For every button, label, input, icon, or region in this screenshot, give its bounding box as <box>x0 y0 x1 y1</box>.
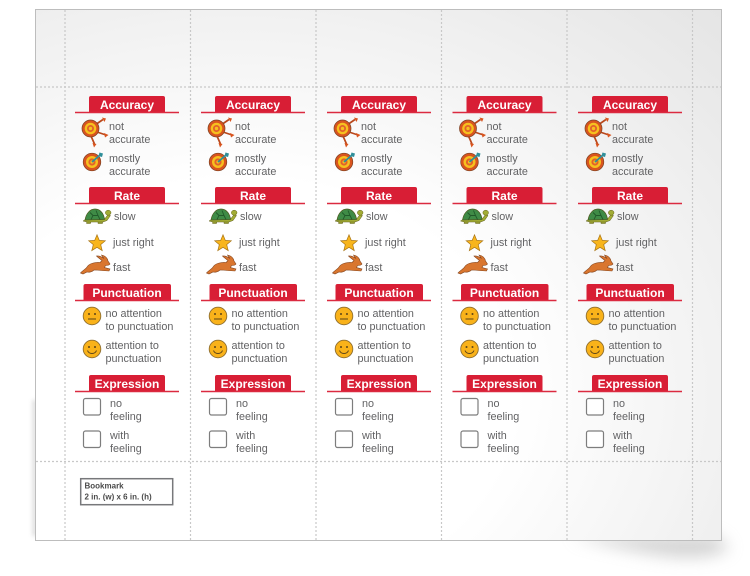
heading: Expression: Expression <box>347 377 411 391</box>
checkbox: no feeling <box>586 398 604 415</box>
text: not accurate: accurate <box>612 134 653 146</box>
text: mostly accurate: mostly <box>486 153 518 165</box>
text: fast: fast <box>365 262 382 274</box>
icon: star <box>592 235 608 251</box>
text: just right: just right <box>112 237 154 249</box>
text: no feeling: feeling <box>613 411 645 423</box>
text: just right: just right <box>238 237 280 249</box>
heading: Rate <box>201 187 305 204</box>
text: fast: fast <box>113 262 130 274</box>
text: attention to punctuation: attention to <box>106 340 159 352</box>
checkbox: no feeling <box>84 398 100 415</box>
icon: star <box>466 235 483 251</box>
heading: Accuracy <box>327 96 431 112</box>
heading: Punctuation <box>201 284 305 300</box>
icon: neutral face <box>586 307 604 325</box>
text: with feeling: feeling <box>362 443 394 455</box>
text: no attention to punctuation: to punctuation <box>483 321 551 333</box>
text: no attention to punctuation: to punctuation <box>232 321 299 333</box>
text: no attention to punctuation: no attention <box>358 308 414 320</box>
text: attention to punctuation: punctuation <box>483 353 539 365</box>
text: with feeling: with <box>612 430 632 442</box>
icon: target hit <box>335 152 355 171</box>
heading: Punctuation <box>327 284 431 300</box>
icon: rabbit <box>80 255 110 274</box>
icon: rabbit <box>206 255 236 274</box>
icon: turtle <box>335 209 363 224</box>
text: no attention to punctuation: no attention <box>483 308 539 320</box>
text: with feeling: with <box>486 430 507 442</box>
icon: smiling face <box>461 340 478 358</box>
heading: Expression <box>327 375 431 392</box>
heading: Punctuation: Punctuation <box>92 286 162 300</box>
heading: Punctuation: Punctuation <box>470 286 539 300</box>
text: mostly accurate: accurate <box>612 166 653 178</box>
heading: Rate <box>327 187 431 204</box>
heading: Expression: Expression <box>95 377 159 391</box>
text: with feeling: with <box>235 430 255 442</box>
icon: target missed <box>585 118 612 148</box>
checkbox: no feeling <box>336 398 352 415</box>
heading: Rate <box>452 187 556 204</box>
text: fast: fast <box>616 262 633 274</box>
paper shadow <box>32 400 730 557</box>
icon: star <box>89 235 105 251</box>
text: mostly accurate: mostly <box>109 153 141 165</box>
bookmark 3 <box>327 96 431 455</box>
text: not accurate: accurate <box>361 134 402 146</box>
text: no feeling: feeling <box>362 411 394 423</box>
text: no feeling: feeling <box>236 411 268 423</box>
heading: Rate: Rate <box>114 189 140 203</box>
text: attention to punctuation: punctuation <box>106 353 161 365</box>
icon: target missed <box>334 118 360 148</box>
text: no feeling: feeling <box>488 411 519 423</box>
size label box <box>81 479 173 505</box>
heading: Rate <box>578 187 682 204</box>
icon: rabbit <box>458 255 488 274</box>
text: attention to punctuation: punctuation <box>232 353 287 365</box>
text: no feeling: no <box>110 398 122 410</box>
icon: star <box>341 235 357 251</box>
heading: Accuracy: Accuracy <box>352 98 406 112</box>
heading: Rate: Rate <box>491 189 518 203</box>
text: attention to punctuation: punctuation <box>608 353 664 365</box>
heading: Punctuation <box>75 284 179 300</box>
heading: Expression: Expression <box>598 377 662 391</box>
text: no attention to punctuation: no attention <box>232 308 288 320</box>
text: mostly accurate: accurate <box>109 166 150 178</box>
text: fast: fast <box>490 262 508 274</box>
text: not accurate: accurate <box>486 134 528 146</box>
heading: Rate: Rate <box>366 189 392 203</box>
text: not accurate: not <box>235 121 250 133</box>
heading: Punctuation: Punctuation <box>218 286 288 300</box>
bookmark 5 <box>578 96 682 455</box>
heading: Punctuation: Punctuation <box>344 286 414 300</box>
text: with feeling: feeling <box>236 443 268 455</box>
text: with feeling: feeling <box>613 443 645 455</box>
text: with feeling: with <box>109 430 129 442</box>
icon: rabbit <box>332 255 362 274</box>
text: mostly accurate: accurate <box>235 166 276 178</box>
heading: Expression: Expression <box>472 377 537 391</box>
icon: turtle <box>586 209 614 224</box>
icon: target hit <box>461 152 480 171</box>
size label box: Bookmark <box>84 482 124 490</box>
heading: Rate: Rate <box>617 189 643 203</box>
text: not accurate: not <box>486 121 502 133</box>
text: attention to punctuation: attention to <box>232 340 285 352</box>
text: attention to punctuation: attention to <box>358 340 411 352</box>
text: not accurate: accurate <box>235 134 276 146</box>
heading: Punctuation <box>452 284 556 300</box>
bookmark 4 <box>452 96 556 455</box>
text: with feeling: with <box>361 430 381 442</box>
heading: Rate: Rate <box>240 189 266 203</box>
icon: rabbit <box>584 255 613 274</box>
text: slow: slow <box>492 211 513 223</box>
text: no attention to punctuation: no attention <box>106 308 162 320</box>
icon: target hit <box>83 152 103 171</box>
heading: Punctuation: Punctuation <box>595 286 665 300</box>
bookmark 1 <box>75 96 179 455</box>
icon: turtle <box>83 209 111 224</box>
icon: smiling face <box>209 340 227 358</box>
icon: neutral face <box>335 307 353 325</box>
text: no feeling: no <box>362 398 374 410</box>
icon: target missed <box>208 118 234 148</box>
checkbox: with feeling <box>336 431 352 448</box>
icon: smiling face <box>586 340 604 358</box>
text: not accurate: not <box>612 121 627 133</box>
icon: star <box>215 235 231 251</box>
text: not accurate: not <box>109 121 124 133</box>
text: attention to punctuation: attention to <box>608 340 662 352</box>
text: no attention to punctuation: no attention <box>608 308 665 320</box>
icon: smiling face <box>335 340 353 358</box>
heading: Accuracy <box>452 96 556 112</box>
checkbox: with feeling <box>461 431 478 448</box>
checkbox: no feeling <box>210 398 226 415</box>
heading: Expression <box>75 375 179 392</box>
heading: Accuracy: Accuracy <box>477 98 532 112</box>
icon: neutral face <box>461 307 478 325</box>
text: slow: slow <box>240 211 262 223</box>
icon: target missed <box>460 118 486 148</box>
text: just right: just right <box>364 237 406 249</box>
checkbox: with feeling <box>586 431 604 448</box>
size label box: 2 in. (w) x 6 in. (h) <box>84 492 152 502</box>
text: just right: just right <box>490 237 531 249</box>
icon: neutral face <box>83 307 101 325</box>
text: mostly accurate: accurate <box>486 166 528 178</box>
icon: turtle <box>209 209 237 224</box>
bookmark 2 <box>201 96 305 455</box>
text: slow: slow <box>617 211 639 223</box>
icon: target hit <box>586 152 606 171</box>
text: no feeling: no <box>613 398 625 410</box>
text: no attention to punctuation: to punctuation <box>358 321 425 333</box>
text: attention to punctuation: attention to <box>483 340 536 352</box>
heading: Accuracy: Accuracy <box>100 98 154 112</box>
text: no attention to punctuation: to punctuation <box>106 321 173 333</box>
checkbox: with feeling <box>84 431 100 448</box>
heading: Accuracy <box>578 96 682 112</box>
checkbox: no feeling <box>461 398 478 415</box>
text: no feeling: no <box>236 398 248 410</box>
heading: Accuracy <box>75 96 179 112</box>
icon: target missed <box>82 118 108 148</box>
text: with feeling: feeling <box>488 443 519 455</box>
text: not accurate: accurate <box>109 134 150 146</box>
checkbox: with feeling <box>210 431 226 448</box>
heading: Expression: Expression <box>221 377 285 391</box>
text: slow: slow <box>114 211 136 223</box>
text: mostly accurate: accurate <box>361 166 402 178</box>
text: fast: fast <box>239 262 256 274</box>
heading: Accuracy <box>201 96 305 112</box>
heading: Accuracy: Accuracy <box>603 98 657 112</box>
text: with feeling: feeling <box>110 443 142 455</box>
text: slow: slow <box>366 211 388 223</box>
text: no attention to punctuation: to punctuation <box>608 321 676 333</box>
icon: target hit <box>209 152 229 171</box>
text: no feeling: feeling <box>110 411 142 423</box>
heading: Expression <box>201 375 305 392</box>
text: not accurate: not <box>361 121 376 133</box>
text: no feeling: no <box>488 398 500 410</box>
icon: neutral face <box>209 307 227 325</box>
heading: Punctuation <box>578 284 682 300</box>
icon: turtle <box>460 209 488 224</box>
heading: Expression <box>452 375 556 392</box>
text: mostly accurate: mostly <box>235 153 267 165</box>
text: attention to punctuation: punctuation <box>358 353 413 365</box>
heading: Accuracy: Accuracy <box>226 98 280 112</box>
text: mostly accurate: mostly <box>361 153 393 165</box>
icon: smiling face <box>83 340 101 358</box>
text: just right: just right <box>615 237 657 249</box>
text: mostly accurate: mostly <box>612 153 644 165</box>
heading: Expression <box>578 375 682 392</box>
heading: Rate <box>75 187 179 204</box>
